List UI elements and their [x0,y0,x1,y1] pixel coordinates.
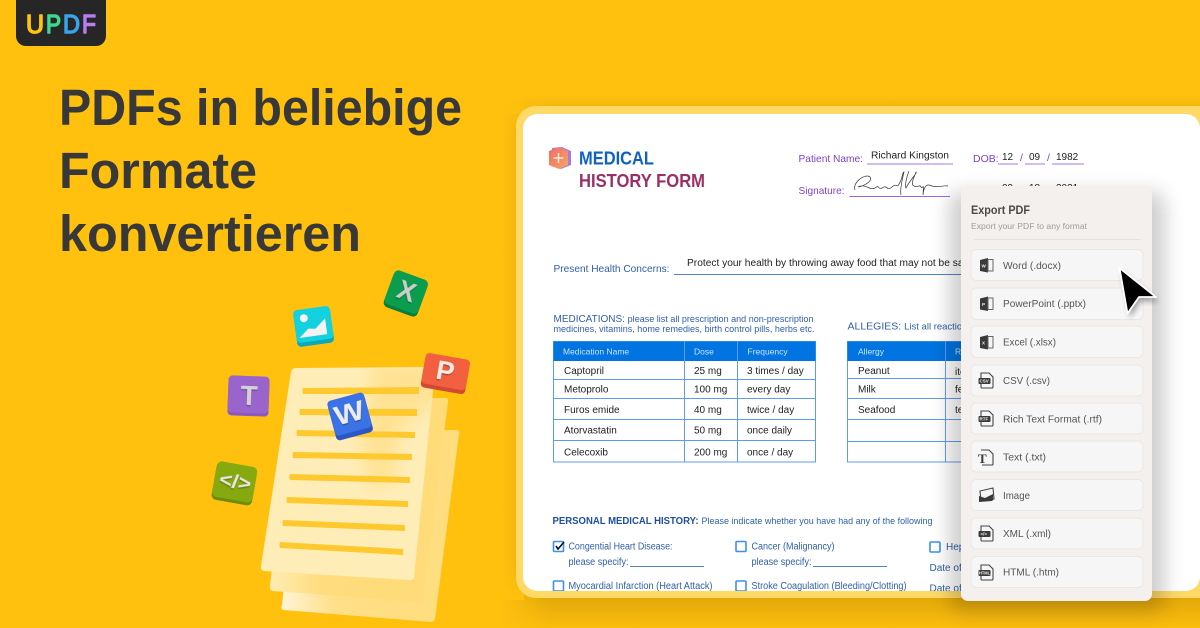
patient fields: 1982 [1056,152,1079,163]
logo: UPDF: D [63,9,80,39]
button: CSV: CSV (.csv) [1003,375,1050,387]
export panel shadow [950,192,1164,610]
allergies table: Peanut [858,366,890,377]
button: HTML: HTML [979,571,990,576]
personal medical history: Cancer (Malignancy) [752,542,834,552]
button: Text: T [978,451,987,466]
logo: UPDF: P [46,9,61,39]
illustration: stacked documents [255,360,459,622]
medications table [553,341,816,462]
patient fields: 09 [1002,183,1014,194]
text lines on front page [280,387,419,555]
patient fields: DOB: [973,153,999,165]
button: PowerPoint: P [982,302,985,307]
allergies table: Milk [858,384,877,396]
button: Text: Text (.txt) [1003,452,1046,464]
icon: Word tile [326,392,374,441]
medications table: 50 mg [694,426,722,436]
panel heading: Export PDF [971,203,1030,217]
personal medical history: Please indicate whether you have had any of the following [702,516,932,527]
button: CSV: CSV [980,379,989,384]
icon: Excel tile: X [393,274,420,308]
icon: PowerPoint tile [420,352,471,395]
title: Formate [59,142,257,199]
form title: MEDICAL [579,148,654,168]
medications table: twice / day [747,405,794,416]
allergies table: Seafood [858,405,895,416]
button: Word [971,250,1143,280]
panel: medical history form [523,114,1200,594]
medications text: medicines, vitamins, home remedies, birth control pills, herbs etc. [554,324,814,335]
medications table: Medication Name [563,346,629,356]
logo: UPDF: F [82,9,96,39]
medications table: 3 times / day [747,366,804,377]
medications table: Captopril [564,366,604,377]
patient fields: 09 [1029,152,1041,163]
medications text: MEDICATIONS: please list all prescription and non-prescription [554,313,814,325]
allergies table: tender [955,405,984,416]
personal medical history: Hepatitis [946,542,985,553]
patient fields: Patient Name: [798,153,863,165]
button: Word: Word (.docx) [1003,260,1061,272]
icon: medical cross [549,147,571,169]
button: Image [971,480,1143,510]
medications table: Furos emide [564,405,620,416]
button: Text [971,441,1143,472]
icon: Word tile: W [331,395,368,431]
form title: HISTORY FORM [579,171,705,191]
allergies table: itching [955,367,984,378]
medications table: once daily [747,426,792,436]
personal medical history: please specify: [568,557,628,568]
medications text [554,315,814,334]
patient fields [798,150,1084,197]
title: PDFs in beliebige [59,79,462,136]
allergies table: Allergy [858,346,885,356]
front page [260,367,434,580]
button: Rich Text Format: Rich Text Format (.rtf) [1003,414,1102,426]
icon: text tile: T [240,380,258,411]
frame shadow [500,94,1200,628]
title: konvertieren [59,205,361,262]
button: Rich Text Format: RTF [980,417,988,422]
icon: code tile: </> [218,469,253,496]
button: XML [971,518,1143,549]
allergies table: Reaction [955,346,989,356]
medications table: Celecoxib [564,448,608,458]
present health concerns: Present Health Concerns: [554,263,670,275]
form frame [516,106,1200,598]
button: PowerPoint [971,288,1143,320]
personal medical history: please specify: [752,557,812,568]
form title [580,152,704,187]
logo: UPDF [16,0,106,46]
title [59,79,462,262]
icon: PowerPoint tile: P [434,355,457,387]
panel subheading: Export your PDF to any format [971,221,1088,231]
allergies table: fever [955,384,978,396]
button: Excel [971,326,1143,358]
patient fields: Signature: [798,185,844,197]
medications table: once / day [747,448,793,458]
button: XML: </> [980,532,987,537]
patient fields: / [1047,152,1050,164]
allergies text: ALLEGIES: List all reactions to food [848,320,1004,332]
patient fields: 2021 [1056,183,1079,194]
medications table: Atorvastatin [564,426,617,436]
button: Excel: X [982,340,985,346]
personal medical history: Congential Heart Disease: [568,542,672,552]
medications table: every day [747,384,790,396]
present health concerns: Protect your health by throwing away food that may not be safe [687,258,972,269]
button: PowerPoint: PowerPoint (.pptx) [1003,298,1086,310]
personal medical history: PERSONAL MEDICAL HISTORY: [552,516,698,527]
button: Image: Image [1003,490,1030,502]
button: Word: W [982,264,986,268]
present health concerns [554,258,972,275]
button: XML: XML (.xml) [1003,528,1051,540]
button: HTML [971,556,1143,588]
button: Rich Text Format [971,403,1143,434]
icon: cursor arrow [1120,268,1159,318]
personal medical history: Date of [930,563,962,574]
patient fields: 12 [1002,152,1014,163]
logo: UPDF: U [26,9,44,39]
personal medical history: Myocardial Infarction (Heart Attack) [568,581,712,592]
medications table: 100 mg [694,384,727,396]
icon: text tile [227,375,270,417]
button: CSV [971,365,1143,396]
medications table: Frequency [748,346,788,356]
medications table: Dose [694,346,714,356]
patient fields: Richard Kingston [871,150,949,162]
patient fields: / [1020,152,1023,164]
medications table: 25 mg [694,366,722,377]
panel: export PDF [961,186,1152,601]
medications table: Metoprolo [564,384,609,396]
medications table: 200 mg [694,448,727,458]
allergies table [847,341,961,462]
icon: code tile [211,461,258,506]
back page [281,430,459,622]
icon: Excel tile [382,269,429,318]
button: HTML: HTML (.htm) [1003,566,1059,578]
button: Excel: Excel (.xlsx) [1003,336,1056,348]
middle page [270,398,448,602]
personal medical history: Date of [930,584,962,594]
personal medical history: Stroke Coagulation (Bleeding/Clotting) [752,581,906,592]
patient fields: 18 [1029,183,1041,194]
medications table: 40 mg [694,405,722,416]
personal medical history [552,517,961,591]
icon: image tile [293,306,334,347]
